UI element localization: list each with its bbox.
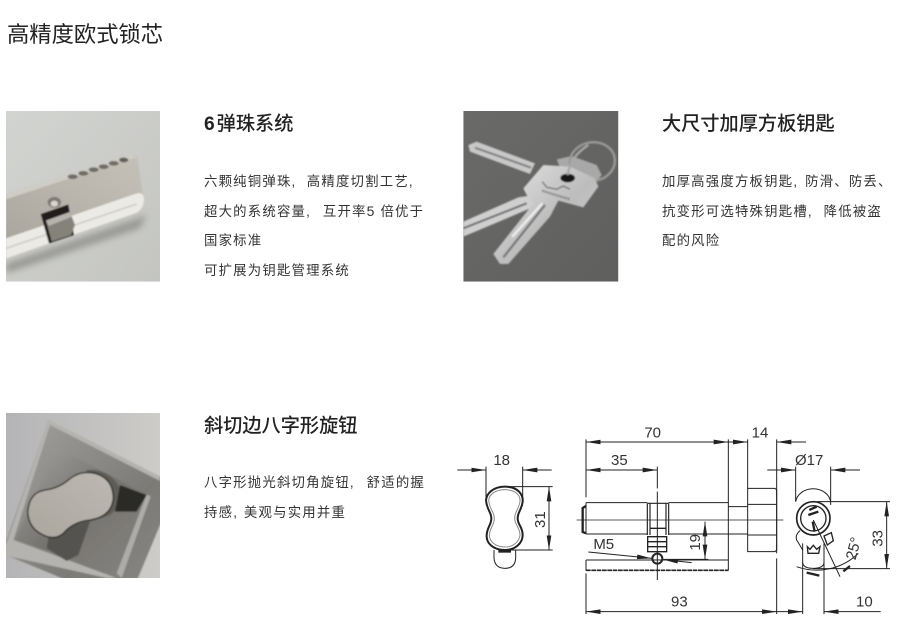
dimension labels: 35 xyxy=(611,452,628,469)
dimension labels: 14 xyxy=(752,424,768,441)
dimension labels: 93 xyxy=(671,594,688,611)
dimension labels: 31 xyxy=(532,511,549,528)
drawing: key-way end view xyxy=(767,467,890,614)
text: square key description: 加厚高强度方板钥匙,防滑、防丢、 xyxy=(662,174,893,189)
photo: octagonal thumb turn xyxy=(6,413,160,578)
photo: cylinder with pin holes xyxy=(6,111,160,282)
dimension labels: 10 xyxy=(856,594,873,611)
dimension labels: 25° xyxy=(843,535,865,562)
technical drawing: cylinder dimensions xyxy=(457,424,890,614)
text: square key description: 抗变形可选特殊钥匙槽,降低被盗 xyxy=(662,204,882,219)
text: 6 pin system description: 六颗纯铜弹珠,高精度切割工艺, xyxy=(204,174,414,189)
dimension labels: M5 xyxy=(593,536,614,553)
heading: 6 pin system: 6弹珠系统 xyxy=(204,114,293,135)
text: thumb turn description: 八字形抛光斜切角旋钮,舒适的握 xyxy=(204,475,425,490)
drawing: side view xyxy=(577,439,783,614)
dimension labels xyxy=(493,424,887,611)
heading: square key: 大尺寸加厚方板钥匙 xyxy=(662,114,835,135)
dimension labels: 19 xyxy=(687,534,704,551)
drawing: dimension lines xyxy=(586,442,881,612)
text: thumb turn description: 持感,美观与实用并重 xyxy=(204,505,346,520)
photo: keys on dark surface xyxy=(463,111,618,282)
drawing: thumb-turn end view xyxy=(457,467,553,568)
dimension labels: 18 xyxy=(493,452,510,469)
text: 6 pin system description: 国家标准 xyxy=(204,233,262,248)
text: 6 pin system description: 超大的系统容量,互开率5倍优于 xyxy=(204,203,424,219)
heading: thumb turn: 斜切边八字形旋钮 xyxy=(204,416,358,437)
text: 6 pin system description: 可扩展为钥匙管理系统 xyxy=(204,263,350,278)
text: square key description xyxy=(662,174,893,248)
dimension labels: 33 xyxy=(870,530,887,547)
dimension labels: Ø17 xyxy=(795,452,823,469)
text: square key description: 配的风险 xyxy=(662,233,720,248)
text: thumb turn description xyxy=(204,475,425,520)
dimension labels: 70 xyxy=(644,424,661,441)
title: 高精度欧式锁芯 xyxy=(7,22,163,47)
text: 6 pin system description xyxy=(204,174,424,278)
